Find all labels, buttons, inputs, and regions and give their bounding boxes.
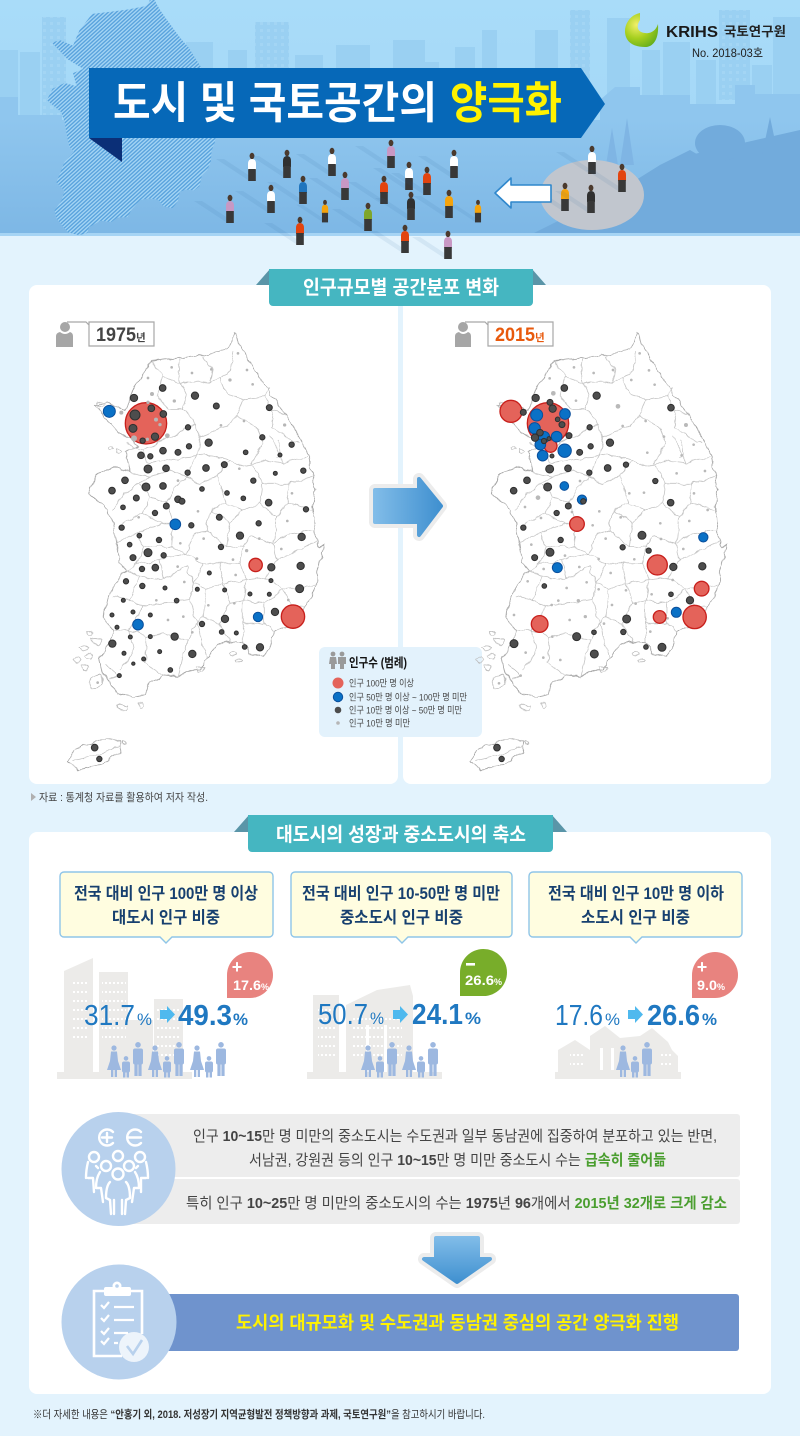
figures mid city: 24.1 [412,999,463,1031]
year label 2015: 년 [535,331,545,344]
callout: small cities: 소도시 인구 비중 [581,908,690,927]
header illustration [0,0,800,236]
figures small town: 17.6 [555,1000,603,1032]
badge -26.6%: % [494,977,502,987]
badge +9.0%: % [717,982,725,992]
badge +17.6%: % [261,982,269,992]
title banner [89,68,605,162]
legend: 인구 10만 명 이상 ~ 50만 명 미만 [349,706,462,716]
figures large city: % [233,1010,248,1029]
icon: people with plus and minus [62,1112,176,1226]
logo [625,13,786,60]
title banner: 양극화 [450,79,562,128]
callout: mid cities: 전국 대비 인구 10-50만 명 미만 [302,884,500,903]
section heading 2: 대도시의 성장과 중소도시의 축소 [276,824,526,846]
section 1 panels [29,285,771,784]
figures large city: 31.7 [84,1000,135,1032]
figures small town: % [702,1010,717,1029]
year label 1975: 년 [136,331,146,344]
people figures mid city [361,1042,438,1078]
summary boxes: 서남권, 강원권 등의 인구 10~15만 명 미만 중소도시 수는 급속히 줄어듦 [249,1152,666,1169]
figures mid city: 50.7 [318,999,368,1031]
band covering map below header [0,236,800,276]
year label 2015: 2015 [495,325,535,346]
section heading 1: 인구규모별 공간분포 변화 [303,277,499,299]
badge +17.6%: 17.6 [233,978,262,993]
section heading 1 [256,269,546,306]
crowd of people [194,140,481,259]
figures large city: 49.3 [178,1000,232,1032]
year label 1975 [56,322,154,347]
badge +9.0% [692,952,738,998]
callout: large cities: 대도시 인구 비중 [112,908,220,927]
footnote: ※더 자세한 내용은 “안홍기 외, 2018. 저성장기 지역균형발전 정책방향과 과제, 국토연구원”을 참고하시기 바랍니다. [33,1407,485,1421]
people figures small town [616,1042,652,1078]
white left arrow [495,178,551,208]
badge -26.6% [460,949,507,996]
callout: small cities [529,872,742,943]
figures mid city [318,999,481,1031]
hatched Korea map [47,0,216,235]
figures large city [84,1000,248,1032]
icon: clipboard checklist [62,1264,176,1380]
callout: large cities: 전국 대비 인구 100만 명 이상 [74,884,258,903]
mid city skyline [307,985,442,1079]
figures mid city: % [370,1009,384,1028]
logo: No. 2018-03호 [692,46,763,60]
small town houses [555,1026,681,1079]
callout: mid cities [291,872,512,943]
map 1975 [68,333,324,769]
badge +17.6%: + [232,957,242,977]
map 2015 [471,333,727,769]
source note: 자료 : 통계청 자료를 활용하여 저자 작성. [39,790,208,804]
legend: 인구 50만 명 이상 ~ 100만 명 미만 [349,692,467,704]
legend: 인구수 (범례) [349,655,407,670]
section heading 2 [234,815,567,852]
conclusion bar [140,1294,739,1351]
badge -26.6%: 26.6 [465,973,495,988]
legend: 인구 100만 명 이상 [349,678,414,690]
year label 2015 [455,322,553,347]
conclusion bar: 도시의 대규모화 및 수도권과 동남권 중심의 공간 양극화 진행 [236,1313,679,1333]
badge +9.0%: + [697,957,707,977]
summary boxes: 특히 인구 10~25만 명 미만의 중소도시의 수는 1975년 96개에서 2015년 32개로 크게 감소 [186,1195,727,1212]
logo: KRIHS [666,24,718,41]
down arrow [424,1238,490,1282]
gray circle group [529,146,644,230]
callout: large cities [60,872,273,943]
figures large city: % [137,1010,152,1029]
badge +9.0%: 9.0 [697,978,717,993]
figures mid city: % [465,1009,481,1028]
figures small town [555,1000,717,1032]
year label 1975: 1975 [96,325,136,346]
figures small town: % [605,1010,620,1029]
logo: 국토연구원 [724,24,786,39]
summary boxes: 인구 10~15만 명 미만의 중소도시는 수도권과 일부 동남권에 집중하여 분포하고 있는 반면, [193,1128,717,1145]
title banner: 도시 및 국토공간의 [113,79,437,128]
people figures large city [107,1042,226,1078]
legend: 인구 10만 명 미만 [349,718,410,730]
section 2 panel [29,832,771,1394]
large city skyline [57,958,192,1079]
badge +17.6% [227,952,273,998]
summary boxes [118,1114,740,1224]
legend [319,647,482,737]
figures small town: 26.6 [647,1000,700,1032]
legend people icon [329,652,346,669]
center arrow [375,479,441,535]
callout: small cities: 전국 대비 인구 10만 명 이하 [548,884,724,903]
callout: mid cities: 중소도시 인구 비중 [340,908,463,927]
